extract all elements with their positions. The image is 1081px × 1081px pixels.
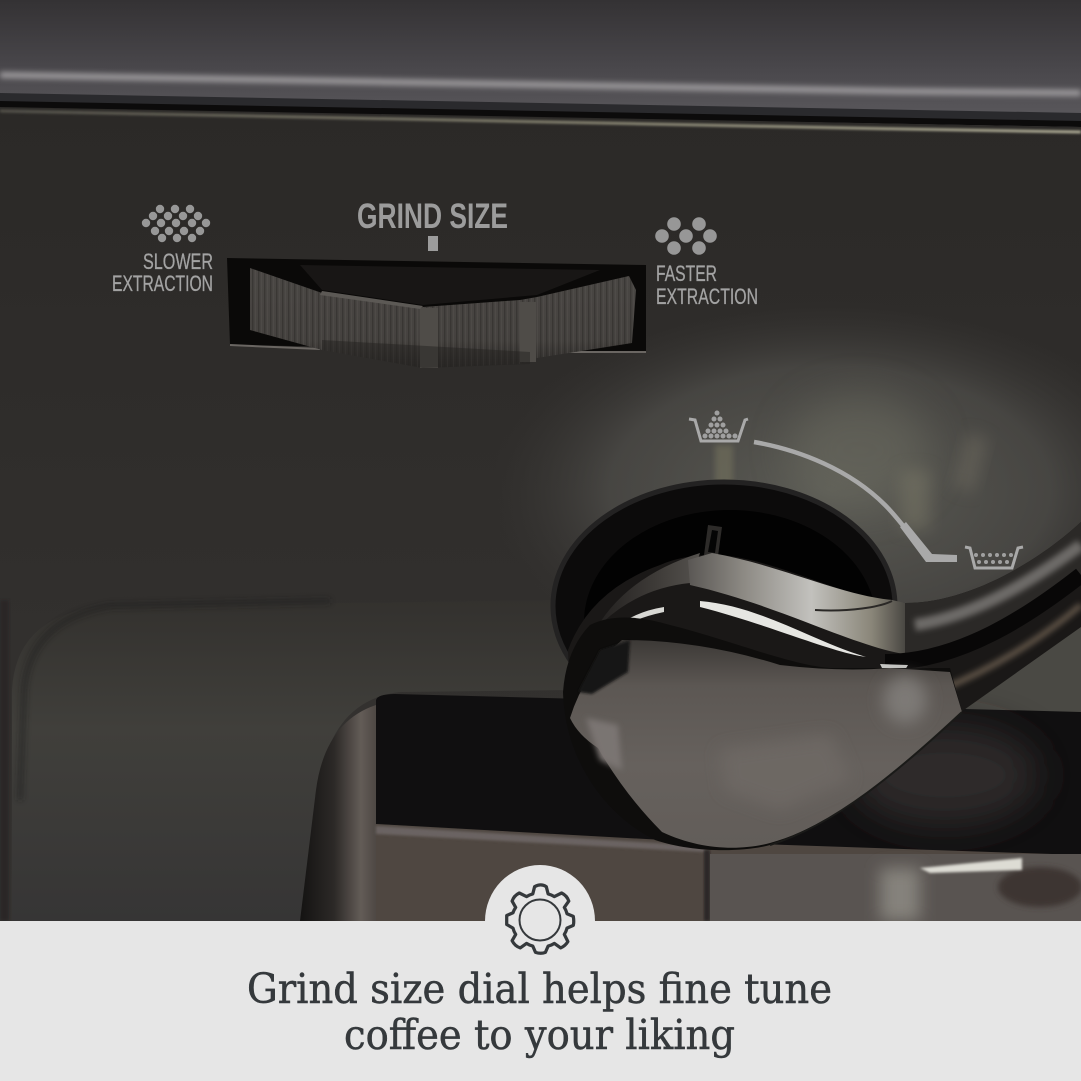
label: faster extraction bbox=[656, 261, 758, 309]
caption text bbox=[247, 965, 832, 1059]
label: faster extraction: EXTRACTION bbox=[656, 284, 758, 309]
icon: fine grounds bbox=[142, 205, 210, 242]
tamping lever arm bbox=[568, 522, 1081, 712]
dial top scale shadow bbox=[300, 265, 600, 305]
label: slower extraction: EXTRACTION bbox=[112, 271, 213, 296]
label: slower extraction bbox=[112, 249, 213, 296]
caption text: Grind size dial helps fine tune bbox=[247, 965, 832, 1013]
tamping scale end bbox=[900, 522, 957, 562]
tamping lever spoon head bbox=[563, 618, 962, 850]
caption panel bbox=[0, 921, 1081, 1081]
dial slot bbox=[227, 258, 646, 352]
icon: gear bbox=[507, 885, 574, 953]
grind size dial knob bbox=[250, 268, 636, 368]
heading: grind size: GRIND SIZE bbox=[357, 197, 508, 236]
label: faster extraction: FASTER bbox=[656, 261, 717, 286]
icon: level basket bbox=[965, 547, 1023, 568]
drip tray front bbox=[376, 824, 1081, 921]
icon: full basket bbox=[689, 410, 748, 441]
icon badge bbox=[485, 865, 595, 921]
machine top casing band bbox=[0, 0, 1081, 130]
lower recess body block bbox=[0, 600, 570, 921]
label: slower extraction: SLOWER bbox=[143, 249, 213, 274]
tamping lever socket ring bbox=[553, 482, 895, 734]
caption text: coffee to your liking bbox=[344, 1011, 735, 1059]
side strip bbox=[300, 705, 376, 921]
dark drip slot bbox=[376, 694, 1081, 870]
tamping scale arc bbox=[754, 442, 932, 557]
grind size tick mark bbox=[428, 236, 438, 251]
brushed metal front panel bbox=[0, 107, 1081, 921]
icon: coarse grounds bbox=[655, 217, 717, 255]
